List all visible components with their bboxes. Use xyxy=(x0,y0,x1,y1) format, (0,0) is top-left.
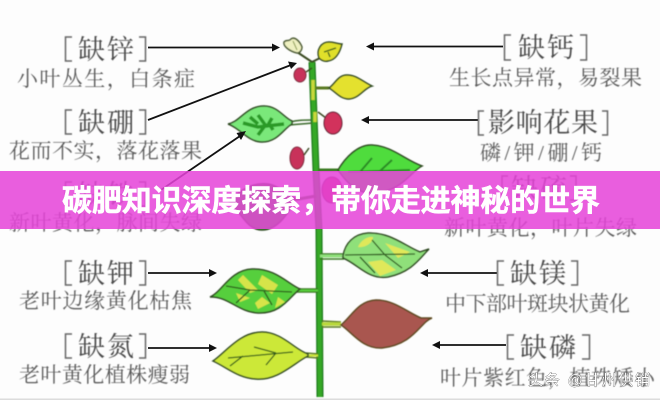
label: zinc deficiency: 缺锌 xyxy=(78,35,134,65)
label: sulfur deficiency xyxy=(444,174,637,241)
arrow: calcium xyxy=(366,42,503,50)
label: phosphorus deficiency: 缺磷 xyxy=(520,333,576,363)
label: boron deficiency xyxy=(9,108,202,164)
title band xyxy=(0,171,660,229)
green leaf: boron deficiency xyxy=(228,106,312,142)
red fruit: middle right xyxy=(318,112,342,134)
label: magnesium deficiency: 中下部叶斑块状黄化 xyxy=(445,292,630,316)
arrow: nitrogen xyxy=(148,344,217,352)
label: phosphorus deficiency: 叶片紫红色，植株矮小 xyxy=(440,366,656,391)
green leaf: left, behind band xyxy=(228,184,316,230)
arrow: potassium xyxy=(148,269,217,277)
label: nitrogen deficiency: 老叶黄化植株瘦弱 xyxy=(19,363,190,387)
arrow: flower and fruit xyxy=(361,116,478,124)
label: magnesium deficiency: 缺镁 xyxy=(510,259,566,289)
watermark: 头条 @甘州供销 xyxy=(528,372,650,389)
mottled leaf: magnesium deficiency xyxy=(320,233,429,277)
label: sulfur deficiency: 缺硫 xyxy=(511,174,567,204)
label: iron deficiency xyxy=(9,180,202,236)
yellow leaf xyxy=(315,75,372,99)
label: calcium deficiency xyxy=(449,33,642,91)
label: boron deficiency: 缺硼 xyxy=(78,108,134,138)
green leaf: right, behind band xyxy=(318,145,422,193)
label: nitrogen deficiency: 缺氮 xyxy=(78,332,134,362)
arrow: boron xyxy=(148,62,297,120)
label: iron deficiency: 缺铁 xyxy=(78,180,134,210)
label: affects flowers and fruit: 磷/钾/硼/钙 xyxy=(480,141,602,165)
label: zinc deficiency xyxy=(17,35,195,92)
bottom edge line xyxy=(0,398,660,400)
label: sulfur deficiency: 新叶黄化，叶片失绿 xyxy=(444,216,637,241)
label: nitrogen deficiency xyxy=(19,332,190,387)
label: magnesium deficiency xyxy=(445,259,630,316)
label: affects flowers and fruit xyxy=(478,108,608,165)
arrow: iron xyxy=(158,131,246,192)
bud: top left xyxy=(284,38,312,62)
label: boron deficiency: 花而不实，落花落果 xyxy=(9,139,202,164)
plant stem xyxy=(312,62,320,397)
arrow: magnesium xyxy=(420,269,497,277)
label: potassium deficiency: 老叶边缘黄化枯焦 xyxy=(19,289,193,313)
title: 碳肥知识深度探索，带你走进神秘的世界 xyxy=(62,185,600,218)
small yellow leaf: top right xyxy=(312,42,342,62)
yellow green leaf: nitrogen deficiency xyxy=(213,332,318,379)
mottled leaf: potassium deficiency xyxy=(210,269,318,313)
label: zinc deficiency: 小叶丛生，白条症 xyxy=(17,67,195,92)
label: phosphorus deficiency xyxy=(440,333,656,391)
plant diagram xyxy=(210,38,432,397)
label: calcium deficiency: 生长点异常，易裂果 xyxy=(449,66,642,91)
red fruit: upper left xyxy=(294,68,312,82)
red fruit: lower left xyxy=(290,147,309,169)
arrow: zinc xyxy=(148,44,280,52)
brown leaf: phosphorus deficiency xyxy=(322,300,432,348)
arrow: phosphorus xyxy=(432,341,506,349)
fruit: right, behind band xyxy=(322,177,342,203)
label: affects flowers and fruit: 影响花果 xyxy=(488,108,598,138)
label: potassium deficiency: 缺钾 xyxy=(78,259,134,289)
label: calcium deficiency: 缺钙 xyxy=(518,33,574,63)
label: potassium deficiency xyxy=(19,259,193,313)
label: iron deficiency: 新叶黄化，脉间失绿 xyxy=(9,211,202,236)
